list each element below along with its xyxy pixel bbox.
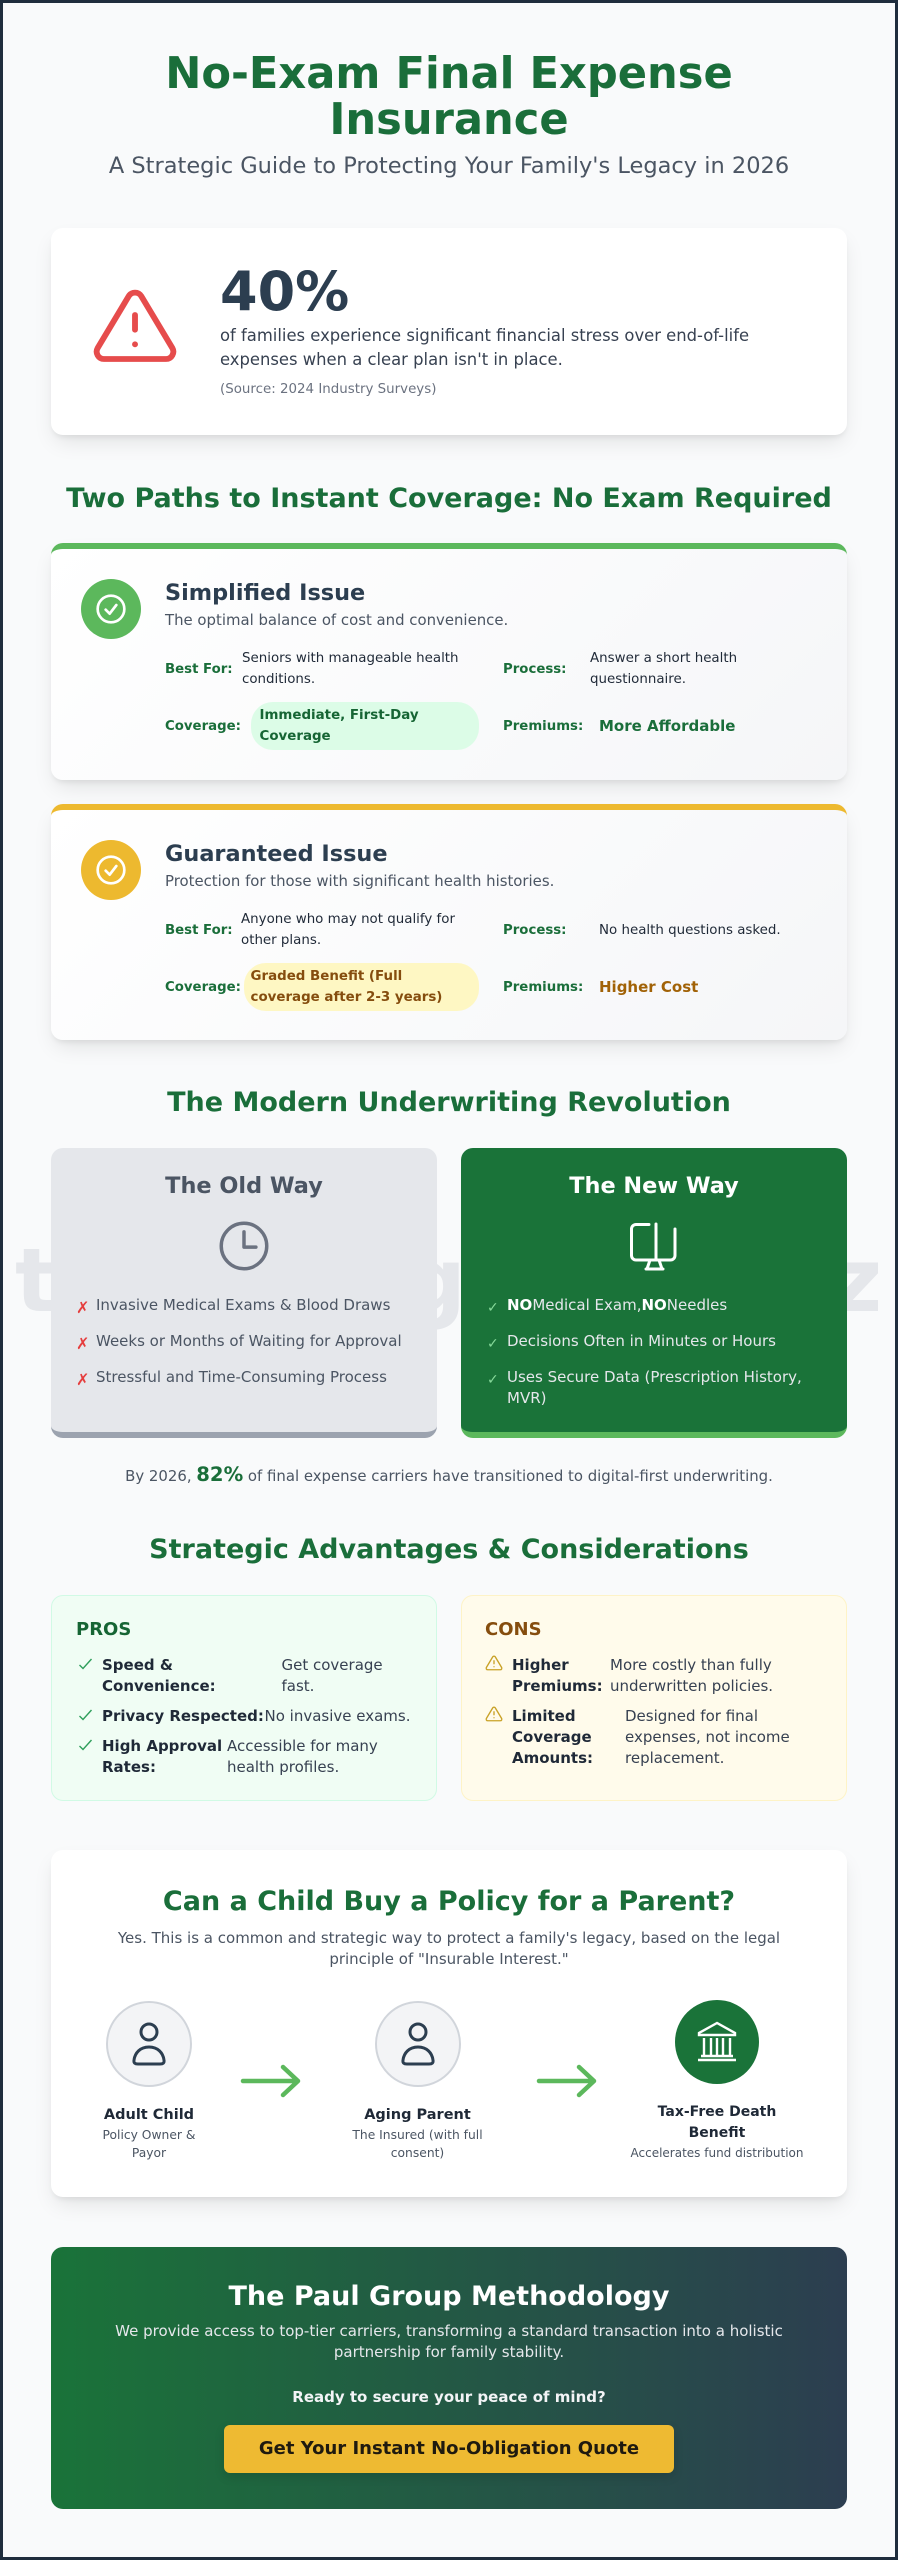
watermark: g (403, 1229, 466, 1332)
new way title: The New Way (569, 1173, 739, 1199)
panel: cons (461, 1595, 847, 1801)
value: best for: conditions. (242, 672, 315, 687)
panel intro: Yes. This is a common and strategic way to protect a family's legacy, based on the legal (118, 1929, 780, 1947)
pros item: approval: Rates: (102, 1758, 156, 1776)
step: aging parent (352, 2001, 483, 2160)
card title: Simplified Issue (165, 580, 365, 606)
list: new way benefits: MVR) (507, 1389, 546, 1407)
statistic description (220, 326, 749, 369)
title: No-Exam Final Expense (165, 49, 733, 99)
icon: bank building (675, 2000, 759, 2084)
pros item: speed: fast. (282, 1677, 314, 1695)
label: coverage: Coverage: (165, 719, 241, 734)
icon: clock (220, 1222, 268, 1270)
statistic number: 40% (220, 260, 349, 323)
label: best for: Best For: (165, 662, 233, 677)
button: instant quote: Get Your Instant No-Obligation Quote (259, 2438, 639, 2459)
list: old way drawbacks: Stressful and Time-Consuming Process (96, 1368, 387, 1386)
value: best for: other plans. (241, 933, 321, 948)
list: new way benefits: ✓ (487, 1336, 499, 1352)
panel: child buys policy for parent (51, 1850, 847, 2197)
step: adult child (103, 2001, 195, 2160)
cons item: limited amounts: Designed for final (625, 1707, 758, 1725)
cons item: limited amounts: expenses, not income (625, 1728, 790, 1746)
value: process: Answer a short health (590, 651, 737, 666)
value: best for: Seniors with manageable health (242, 651, 459, 666)
cons item: premiums: underwritten policies. (610, 1677, 773, 1695)
step text (103, 2107, 195, 2160)
value: process: questionnaire. (590, 672, 686, 687)
icon: gold check badge (81, 840, 141, 900)
cta description: partnership for family stability. (334, 2342, 564, 2360)
label: premiums: Premiums: (503, 719, 583, 734)
cons item: premiums: More costly than fully (610, 1656, 772, 1674)
step text: Accelerates fund distribution (630, 2146, 804, 2160)
step text: Benefit (689, 2124, 745, 2140)
value: process (590, 651, 737, 687)
arrow: parent to benefit (536, 2064, 596, 2098)
value: premiums: Higher Cost (599, 978, 698, 996)
label: premiums: Premiums: (503, 980, 583, 995)
pros item: speed: Speed & (102, 1656, 173, 1674)
statistic description: expenses when a clear plan isn't in place. (220, 350, 563, 369)
pros item: approval (79, 1737, 378, 1776)
pros item: approval: High Approval (102, 1737, 222, 1755)
list: new way benefits: NOMedical Exam,NONeedles (507, 1296, 727, 1314)
label: coverage: Coverage: (165, 980, 241, 995)
icon: person (374, 2001, 460, 2087)
pill: coverage value: coverage after 2-3 years) (250, 990, 442, 1005)
watermark: z (831, 1229, 882, 1332)
pros item: approval: Accessible for many (227, 1737, 378, 1755)
cta description (115, 2322, 783, 2360)
list: new way benefits (487, 1296, 802, 1407)
cons item: limited amounts: Amounts: (512, 1749, 593, 1767)
title (165, 49, 733, 145)
value: best for (242, 651, 459, 687)
value: premiums: More Affordable (599, 717, 735, 735)
step text: consent) (391, 2146, 444, 2160)
heading: two paths: Two Paths to Instant Coverage: No Exam Required (66, 483, 832, 514)
step text: Payor (132, 2146, 166, 2160)
list: new way benefits: Decisions Often in Minutes or Hours (507, 1332, 776, 1350)
cons item: premiums (486, 1656, 773, 1695)
list: new way benefits: ✓ (487, 1372, 499, 1388)
panel intro: principle of "Insurable Interest." (329, 1950, 569, 1968)
step text: Adult Child (104, 2107, 194, 2123)
label: best for: Best For: (165, 923, 233, 938)
heading: underwriting revolution: The Modern Underwriting Revolution (167, 1087, 731, 1118)
pros item: speed (79, 1656, 383, 1695)
label: process: Process: (503, 662, 566, 677)
value: process: No health questions asked. (599, 923, 781, 938)
cta heading: The Paul Group Methodology (229, 2281, 669, 2312)
pros item: speed: Convenience: (102, 1677, 216, 1695)
watermark (15, 1229, 882, 1332)
pros item: privacy: No invasive exams. (264, 1707, 410, 1725)
cta description: We provide access to top-tier carriers, transforming a standard transaction into a holistic (115, 2322, 783, 2340)
source note: (Source: 2024 Industry Surveys) (220, 382, 436, 397)
list: old way drawbacks: ✗ (76, 1298, 89, 1317)
step: tax-free benefit (630, 2000, 804, 2160)
card subtitle: Protection for those with significant health histories. (165, 872, 554, 890)
title: Insurance (329, 95, 569, 145)
pill: coverage value: Immediate, First-Day (260, 708, 419, 723)
list: old way drawbacks: Weeks or Months of Waiting for Approval (96, 1332, 402, 1350)
pros item: approval: health profiles. (227, 1758, 339, 1776)
cons item: limited amounts: Coverage (512, 1728, 592, 1746)
step text: Policy Owner & (103, 2128, 195, 2142)
stat callout: 82%: By 2026, 82% of final expense carriers have transitioned to digital-first underwriting. (125, 1463, 773, 1486)
step text (352, 2107, 483, 2160)
button: instant quote (224, 2425, 674, 2473)
panel: pros (51, 1595, 437, 1801)
step text: The Insured (with full (352, 2128, 483, 2142)
step text: Aging Parent (364, 2107, 471, 2123)
panel: guaranteed issue (51, 804, 847, 1040)
card subtitle: The optimal balance of cost and convenience. (165, 611, 508, 629)
arrow: child to parent (240, 2064, 300, 2098)
cons heading: CONS (485, 1619, 542, 1640)
list: old way drawbacks: Invasive Medical Exams & Blood Draws (96, 1296, 390, 1314)
icon: monitor (630, 1222, 676, 1270)
cons item: limited amounts: Limited (512, 1707, 576, 1725)
old way title: The Old Way (165, 1173, 323, 1199)
step text (630, 2104, 804, 2160)
panel: simplified issue (51, 543, 847, 780)
panel: the old way (51, 1148, 437, 1438)
statistic description: of families experience significant financial stress over end-of-life (220, 326, 749, 345)
panel heading: Can a Child Buy a Policy for a Parent? (163, 1886, 735, 1917)
value: best for: Anyone who may not qualify for (241, 912, 455, 927)
cta prompt: Ready to secure your peace of mind? (292, 2388, 606, 2406)
icon: green check badge (81, 579, 141, 639)
value: best for (241, 912, 455, 948)
list: old way drawbacks: ✗ (76, 1334, 89, 1353)
list: old way drawbacks: ✗ (76, 1370, 89, 1389)
panel: the new way (461, 1148, 847, 1438)
icon: warning triangle (94, 290, 176, 362)
pill: coverage value (250, 702, 478, 750)
heading: advantages and considerations: Strategic Advantages & Considerations (149, 1534, 749, 1565)
pros item: privacy: Privacy Respected: (102, 1707, 264, 1725)
panel: call to action (51, 2247, 847, 2509)
pill: coverage value: Coverage (260, 729, 331, 744)
step text: Tax-Free Death (658, 2104, 776, 2120)
cons item: premiums: Premiums: (512, 1677, 603, 1695)
cons item: limited amounts (486, 1706, 790, 1767)
panel: 40% statistic (51, 228, 847, 435)
pill: coverage value: Graded Benefit (Full (250, 969, 402, 984)
list: old way drawbacks (76, 1296, 402, 1389)
pill: coverage value (244, 963, 478, 1011)
list: new way benefits: ✓ (487, 1300, 499, 1316)
cons item: limited amounts: replacement. (625, 1749, 724, 1767)
icon: person (106, 2001, 192, 2087)
label: process: Process: (503, 923, 566, 938)
list: new way benefits: Uses Secure Data (Prescription History, (507, 1368, 802, 1386)
watermark: t (15, 1229, 57, 1332)
pros heading: PROS (76, 1619, 131, 1640)
card title: Guaranteed Issue (165, 841, 388, 867)
subtitle: A Strategic Guide to Protecting Your Family's Legacy in 2026 (109, 153, 789, 179)
pros item: speed: Get coverage (282, 1656, 383, 1674)
cons item: premiums: Higher (512, 1656, 569, 1674)
panel intro (118, 1929, 780, 1968)
pros item: privacy (79, 1707, 410, 1725)
